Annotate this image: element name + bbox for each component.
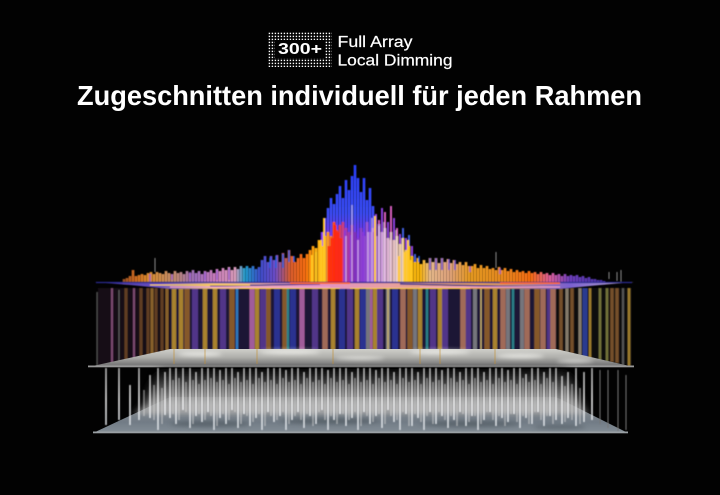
glow haze	[136, 368, 586, 414]
plane mottling	[170, 418, 586, 429]
badge text: Local Dimming	[338, 52, 452, 70]
layer: colored bars wall	[97, 288, 632, 366]
icon: dotted 300+ frame	[268, 32, 332, 67]
peak: violet and pale streaks	[345, 230, 374, 284]
layer: middle silver plane	[88, 349, 634, 367]
badge: 300+ Full Array Local Dimming	[268, 32, 452, 70]
white spikes	[106, 368, 626, 431]
badge text	[338, 34, 452, 70]
peak: violet and pink tips	[376, 208, 412, 284]
badge text: Full Array	[338, 34, 413, 51]
peak: blue tips	[322, 165, 373, 284]
layer: lower white spikes on grey plane	[93, 368, 628, 433]
icon: dotted 300+ frame: 300+	[278, 41, 322, 58]
lower plane	[93, 397, 628, 433]
title: Zugeschnitten individuell für jeden Rahmen	[77, 80, 642, 111]
peak: main spectrum	[124, 222, 604, 284]
layer: top color spectrum peaks	[124, 165, 621, 284]
layer: top thin color plane	[94, 282, 634, 289]
